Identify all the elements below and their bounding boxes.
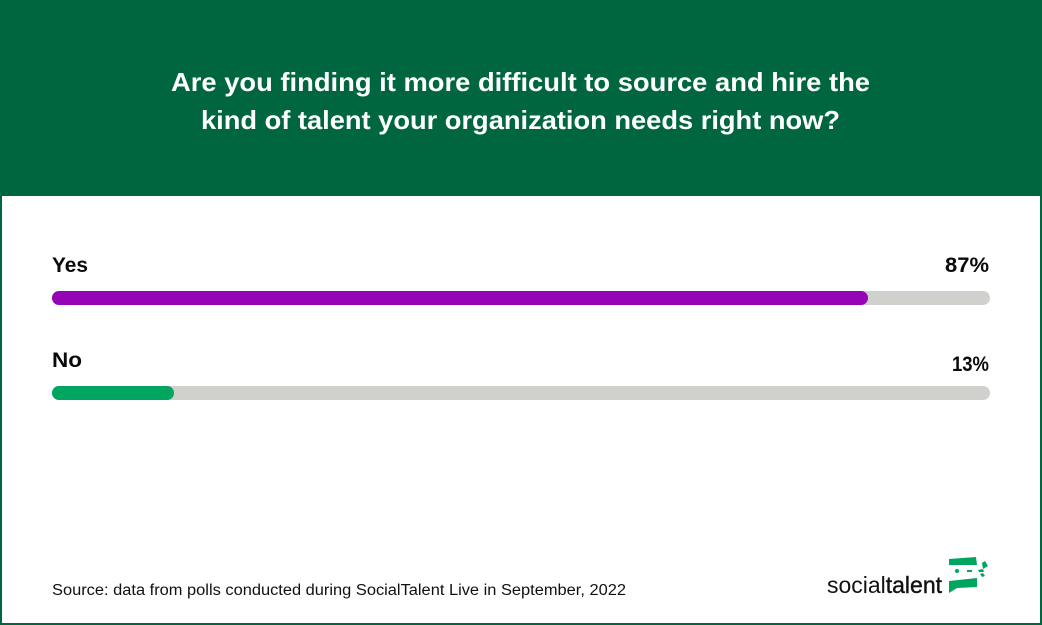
row: No: [52, 349, 990, 400]
logo wordmark: socialtalent: [827, 572, 943, 598]
source note: Source: data from polls conducted during SocialTalent Live in September, 2022: [52, 582, 626, 599]
logo icon: [949, 557, 988, 593]
title: [171, 67, 870, 135]
row: Yes: [52, 254, 990, 305]
row: Yes: Yes: [52, 254, 88, 277]
title: kind of talent your organization needs right now?: [201, 105, 840, 135]
title: Are you finding it more difficult to source and hire the: [171, 67, 870, 97]
logo: socialtalent: [827, 557, 988, 598]
row: Yes: 87%: [945, 254, 989, 277]
row: No: No: [52, 349, 82, 372]
chart: poll results: [52, 254, 990, 400]
header band: [0, 0, 1042, 196]
row: No: 13%: [952, 353, 989, 376]
